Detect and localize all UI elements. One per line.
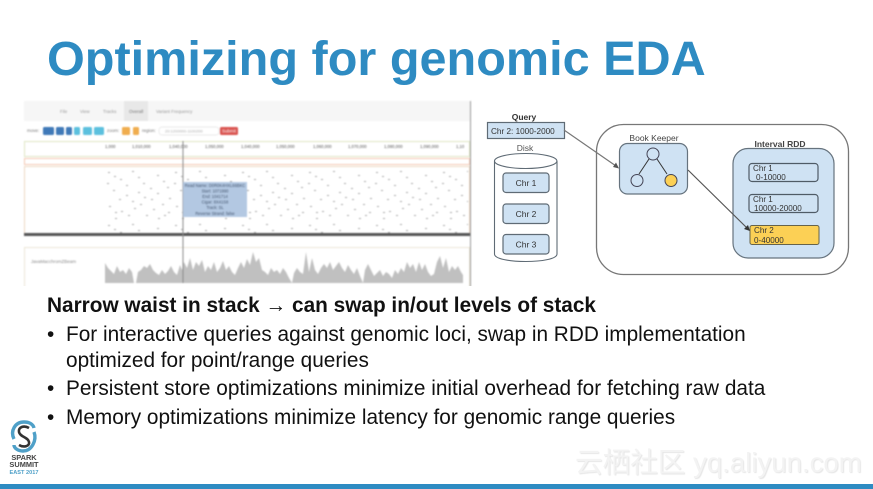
menu bar xyxy=(24,101,470,121)
position axis track: 1,040,000 xyxy=(241,144,260,149)
zoom and region controls: zoom: xyxy=(107,128,119,133)
system outline xyxy=(596,124,848,274)
bullet 3: Memory optimizations minimize latency for genomic range queries xyxy=(66,406,675,429)
bullet 3 mark: • xyxy=(47,406,54,429)
reference track xyxy=(24,158,470,164)
logo: spark summit east 2017 xyxy=(9,420,39,476)
panel: genome browser screenshot xyxy=(23,100,472,286)
position axis track: 1,10 xyxy=(456,144,465,149)
logo text xyxy=(9,453,39,476)
coverage track xyxy=(24,248,470,290)
arrow: query to book keeper xyxy=(564,130,619,168)
screenshot bottom crop xyxy=(20,286,475,292)
partition chr 2 0-40000: 0-40000 xyxy=(754,236,784,245)
menu bar: Variant Frequency xyxy=(156,109,193,114)
partition chr 1 0-10000: Chr 1 xyxy=(753,164,773,173)
position axis track: 1,050,000 xyxy=(276,144,295,149)
book keeper: Book Keeper xyxy=(629,133,679,143)
partition chr 1 0-10000 xyxy=(749,164,818,182)
bullet 2 mark: • xyxy=(47,377,54,400)
menu bar: Tracks xyxy=(103,109,117,114)
zoom and region controls: Submit xyxy=(222,128,237,134)
read tooltip: Start: 1071990 xyxy=(202,188,229,194)
position axis track: 1,050,000 xyxy=(205,144,224,149)
zoom and region controls: region: xyxy=(142,128,156,133)
zoom and region controls: move: xyxy=(27,128,39,133)
zoom and region controls: 20:1200000-1100200 xyxy=(165,128,204,134)
logo text: SPARK xyxy=(11,453,37,462)
position axis track: 1,060,000 xyxy=(313,144,332,149)
read tooltip: End: 1041714 xyxy=(202,194,228,199)
partition chr 1 10000-20000 xyxy=(749,194,818,213)
position axis track: 1,070,000 xyxy=(348,144,367,149)
read tooltip: Track: SL xyxy=(206,205,224,210)
title: Optimizing for genomic EDA xyxy=(47,32,706,86)
menu bar: File xyxy=(60,109,68,114)
bullet 1 xyxy=(66,323,746,372)
footer bar xyxy=(0,484,873,489)
partition chr 2 0-40000: Chr 2 xyxy=(754,226,774,235)
query: Query xyxy=(512,112,537,122)
disk: Disk xyxy=(517,143,534,153)
position axis track: 1,040,000 xyxy=(169,144,188,149)
chr 3: Chr 3 xyxy=(516,240,537,250)
interval rdd: Interval RDD xyxy=(754,139,806,149)
locus marker line xyxy=(182,141,184,283)
coverage track: JavaMacchromZBeam xyxy=(31,259,76,264)
zoom and region controls xyxy=(27,127,238,135)
text block: takeaways xyxy=(47,294,766,429)
right edge of screenshot xyxy=(470,101,471,287)
logo text: SUMMIT xyxy=(9,460,39,469)
read tooltip: Reverse Strand: false xyxy=(195,211,235,216)
read tooltip: Read Name: D0R0K4HXL66BKC xyxy=(185,183,245,188)
query: Chr 2: 1000-2000 xyxy=(491,127,555,136)
partition chr 1 10000-20000: 10000-20000 xyxy=(754,204,802,213)
bullet 2: Persistent store optimizations minimize initial overhead for fetching raw data xyxy=(66,377,765,400)
partition chr 2 0-40000 xyxy=(750,226,819,245)
read tooltip: Cigar: 8X41S8 xyxy=(202,200,229,204)
position axis track: 1,080,000 xyxy=(384,144,403,149)
position axis track xyxy=(24,142,470,156)
partition chr 1 10000-20000: Chr 1 xyxy=(753,195,773,204)
subheading: Narrow waist in stack → can swap in/out levels of stack xyxy=(47,294,596,317)
reads track xyxy=(24,166,470,236)
chr 2: Chr 2 xyxy=(516,209,537,219)
position axis track: 1,090,000 xyxy=(420,144,439,149)
position axis track: 1,010,000 xyxy=(132,144,151,149)
menu bar: Overall xyxy=(129,109,143,114)
menu bar: View xyxy=(80,109,90,114)
bullet 1: For interactive queries against genomic loci, swap in RDD implementation xyxy=(66,323,746,346)
diagram: query, disk and book keeper xyxy=(486,112,850,276)
disk xyxy=(494,143,557,262)
arrow: book keeper to interval rdd xyxy=(688,170,750,231)
chr 1: Chr 1 xyxy=(516,178,537,188)
position axis track: 1,000 xyxy=(105,144,116,149)
logo text: EAST 2017 xyxy=(10,470,38,476)
read tooltip xyxy=(183,182,247,217)
interval rdd xyxy=(733,139,834,258)
watermark: 云栖社区 yq.aliyun.com xyxy=(575,447,862,478)
partition chr 1 0-10000: 0-10000 xyxy=(756,173,786,182)
bullet 1: optimized for point/range queries xyxy=(66,349,369,372)
book keeper xyxy=(620,133,688,194)
query xyxy=(488,112,564,138)
bullet 1 mark: • xyxy=(47,323,54,346)
